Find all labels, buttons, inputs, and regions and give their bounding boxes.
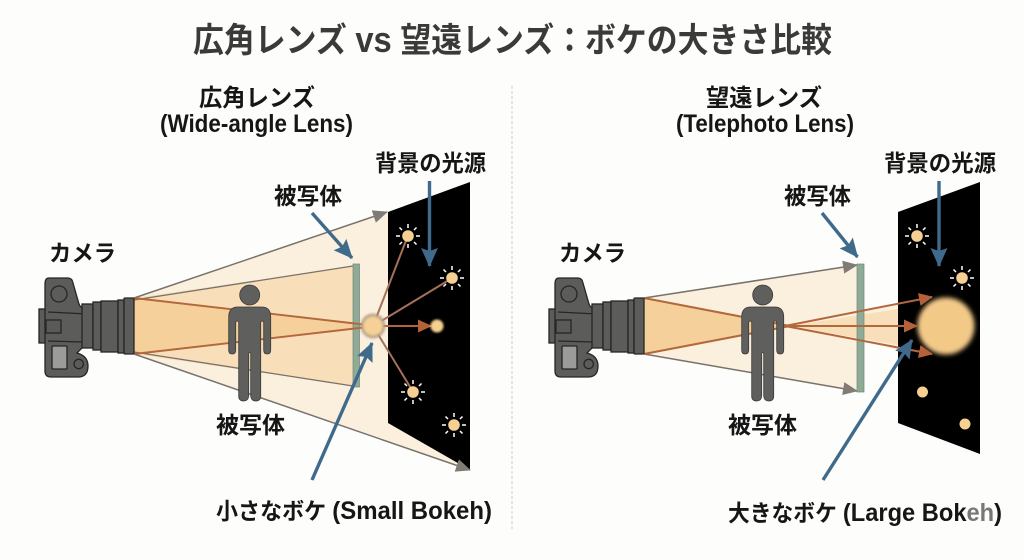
icon: person [742,285,784,401]
heading: telephoto lens: 望遠レンズ [706,84,822,112]
panel: wide-angle lens [39,84,492,525]
heading: telephoto lens [676,84,854,138]
arrow: subject label to plane [312,213,352,258]
label: camera: カメラ [559,240,626,266]
small bokeh disc [362,315,444,337]
heading: wide-angle lens: (Wide-angle Lens) [160,110,353,138]
arrow: subject label to plane [822,213,858,257]
label: background light sources: 背景の光源 [375,150,486,176]
arrow: background label to wall [428,181,431,266]
icon: light sources [396,224,466,437]
icon: camera [549,278,644,377]
arrow: large bokeh label to disc [823,340,912,480]
icon: camera [39,278,134,377]
subject plane [857,264,864,392]
label: small bokeh: 小さなボケ (Small Bokeh) [216,497,492,525]
heading: telephoto lens: (Telephoto Lens) [676,110,854,138]
arrow: small bokeh label to disc [312,343,372,480]
label: camera: カメラ [49,240,116,266]
title: 広角レンズ vs 望遠レンズ：ボケの大きさ比較 [193,19,832,60]
heading: wide-angle lens: 広角レンズ [199,84,315,112]
outer field-of-view arrows [134,212,470,470]
heading: wide-angle lens [160,84,353,138]
light cone: wide field of view [134,212,468,468]
icon: light sources [905,224,974,430]
background panel: black light-source wall [388,182,470,470]
label: subject (lower): 被写体 [216,412,285,438]
light cone: narrow field of view [644,264,898,392]
rays to large bokeh [644,297,932,354]
subject plane [353,264,360,387]
large bokeh disc [918,298,974,354]
label: subject (upper): 被写体 [784,183,851,209]
label: subject (lower): 被写体 [728,412,797,438]
background panel: black light-source wall [898,182,980,454]
label: large bokeh: 大きなボケ (Large Bokeh) [728,499,1002,527]
label: background light sources: 背景の光源 [884,150,996,176]
panel: telephoto lens [549,84,1002,527]
label: subject (upper): 被写体 [274,183,342,209]
arrow: background label to wall [937,181,941,266]
rays from small bokeh to light sources [373,238,449,390]
icon: person [229,285,271,401]
rays through subject [134,298,368,354]
